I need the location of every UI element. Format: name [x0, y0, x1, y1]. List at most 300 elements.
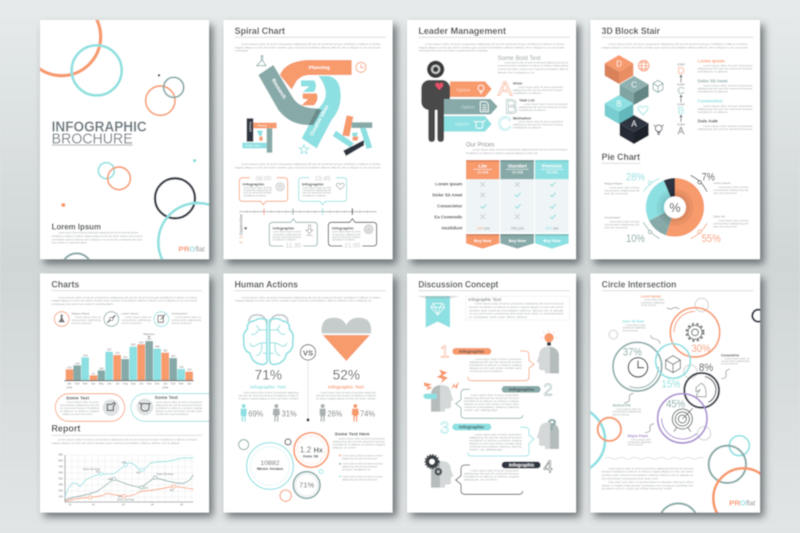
intro text: Lorem ipsum dolor sit amet consectetur adipiscing elit sed do eiusmod tempor incididunt ut labore et dolore [608, 42, 748, 46]
bar chart: 491 [163, 349, 168, 353]
side text block: adipiscing elit sed do eiusmod [342, 465, 377, 469]
pie chart [646, 178, 704, 237]
people statistics [241, 404, 375, 422]
side text block: Lorem ipsum dolor sit amet consect [342, 474, 383, 478]
item 4: aliqua ut enim [464, 478, 499, 482]
bar chart: Maximum [143, 332, 156, 336]
step descriptions: Lorem ipsum dolor sit amet consectetur [703, 104, 753, 108]
intro text box: ex ea commodo consequat duis aute irure dolor in reprehenderit [469, 312, 564, 316]
step ladder: A [678, 126, 685, 137]
body text: Duis aute irure dolor in reprehenderit in voluptate velit esse cillum [608, 480, 694, 484]
callout pill right: Lorem ipsum dolor sit amet consectetur [155, 400, 202, 404]
list item: motivation [498, 116, 564, 132]
side text block: Lorem ipsum dolor sit amet consect [342, 453, 383, 457]
callout: magna aliqua: Lorem ipsum dolor [631, 437, 651, 441]
item 3: adipiscing elit sed do eiusmod tempor [469, 436, 522, 440]
side text block [333, 432, 386, 481]
stat: 52%: et dolore magna aliqua ut enim ad minim veniam [316, 396, 377, 400]
step descriptions: Lorem ipsum dolor sit amet consectetur [703, 64, 753, 68]
pie descriptions: Dolor Sit [713, 215, 725, 219]
line chart: 02 [92, 503, 95, 507]
pricing table: Buy Now [543, 238, 561, 243]
stat: 52%: 52% [333, 368, 360, 383]
head with question mark [537, 417, 559, 449]
large spiral chart: Creative Ideas [309, 104, 330, 137]
line chart: 843 [122, 460, 127, 464]
pricing table: 15,99$ [512, 171, 523, 175]
bar chart: Jan [67, 381, 72, 385]
panel: spiral chart [223, 20, 393, 259]
logo: O [189, 245, 195, 254]
list item: ideas: incididunt ut labore [513, 91, 542, 95]
callout: lorem ipsum: Lorem ipsum dolor [644, 298, 664, 302]
event card 08:00 [239, 175, 288, 205]
bar chart: Jun [107, 381, 112, 385]
heading: 3D Block Stair [602, 26, 660, 36]
panel: discussion concept [407, 273, 576, 513]
callout: nostrud elit: sed do eiusmod [613, 412, 630, 416]
line chart: 04 [151, 503, 154, 507]
step descriptions: incididunt ut labore [698, 90, 728, 94]
pie labels: 28% [626, 171, 645, 183]
feature icons row: Lorem Ipsum [121, 312, 139, 316]
timeline: September [239, 214, 244, 235]
intro text: Lorem ipsum dolor sit amet consectetur adipiscing elit sed do eiusmod tempor incididunt ut labore et dolore [425, 42, 565, 46]
line chart: Dolor Sit Amet [118, 497, 135, 501]
cover title: INFOGRAPHIC [52, 120, 147, 136]
wavy line [605, 457, 704, 459]
versus marker: VS [303, 348, 313, 357]
event card 08:00: 08:00 [255, 175, 272, 182]
item 4: Lorem ipsum dolor sit amet consectetur [471, 469, 519, 473]
callout pill left: do eiusmod tempor incididunt [60, 406, 100, 410]
pricing table: Consectetur [437, 204, 463, 209]
body text: Lorem ipsum dolor sit amet consectetur adipiscing elit sed do eiusmod [608, 466, 694, 470]
pie chart heading: Pie Chart [602, 152, 640, 162]
cover title: BROCHURE [52, 131, 133, 147]
feature icons row [54, 312, 202, 326]
line chart: 276 [144, 486, 149, 490]
step descriptions: adipiscing elit sed do eiusmod tempor [698, 87, 753, 91]
item 2: nisi ut aliquip [464, 408, 498, 412]
timeline: 23 [239, 236, 245, 244]
step ladder: STEP [677, 122, 685, 126]
bar chart: 160 [187, 368, 192, 372]
heading: report: Report [51, 424, 80, 434]
body text: tempor incididunt ut labore et dolore magna aliqua ut enim ad minim [602, 470, 694, 474]
step ladder: STEP [677, 62, 685, 66]
callout: consectetur: sed do eiusmod [721, 362, 738, 366]
callout: magna aliqua: sed do eiusmod [628, 443, 643, 447]
circle cluster [239, 433, 329, 501]
circle: 45% target: 45% [666, 399, 685, 411]
pie descriptions: consectetur adipiscing elit [604, 222, 640, 226]
item 3: nostrud exercitation ullamco laboris [469, 445, 523, 449]
step descriptions: adipiscing elit sed do eiusmod tempor [698, 127, 753, 131]
feature icons row: Consectetur [171, 312, 187, 316]
circle: 15% cube: 15% [661, 379, 681, 391]
pricing table: Premium [542, 164, 562, 169]
item 2: aliqua ut enim ad minim veniam quis [464, 402, 520, 406]
bar chart: 634 [139, 340, 144, 344]
intro text box: in voluptate velit esse cillum dolore [469, 315, 528, 319]
isometric blocks: B [616, 100, 622, 109]
bar chart: 61 [92, 371, 95, 375]
intro text: Lorem ipsum dolor sit amet consectetur adipiscing elit sed do eiusmod tempor incididunt ut labore et dolore [241, 42, 381, 46]
circle cluster: 10882 [260, 460, 280, 467]
prices heading [466, 142, 568, 155]
item 3: Infographic [459, 425, 485, 430]
stat: 71%: Infographic Text [250, 385, 286, 390]
item 2: Lorem ipsum dolor sit amet consectetur [471, 393, 519, 397]
pricing table [432, 160, 569, 249]
event card 21:00 [328, 219, 377, 250]
pie descriptions: consectetur adipiscing elit [713, 188, 749, 192]
large spiral chart: Planning [309, 65, 330, 71]
small spiral left: Planning [258, 125, 267, 127]
line chart: Dolor Sit Amet [83, 467, 100, 471]
feature icons row: Lorem ipsum dolor sit [125, 315, 151, 319]
feature icons row: sed do eiusmod [71, 321, 92, 325]
intro text box: Infographic Text [468, 297, 502, 302]
option arrows: Option [461, 105, 475, 110]
list item: ideas: adipiscing elit sed do eiusmod tempor [513, 88, 563, 92]
intro text: magna aliqua ut enim ad minim veniam quis nostrud exercitation ullamco laboris nisi ut aliquip ex ea commodo [418, 45, 565, 49]
item 2: 2 [543, 380, 553, 400]
callout: lorem ipsum: consectetur adipiscing [641, 300, 665, 304]
bar chart: 367 [171, 354, 176, 358]
line chart: 329 [136, 470, 141, 474]
feature icons row: Lorem ipsum dolor sit [175, 315, 201, 319]
callout: consectetur: consectetur adipiscing [721, 359, 750, 363]
cover subtitle and text [52, 222, 143, 245]
step descriptions: incididunt ut labore [698, 110, 728, 114]
line chart: 200 [58, 495, 63, 499]
decorative circles [39, 19, 210, 260]
item 2: Infographic [509, 387, 535, 392]
report intro text [51, 438, 198, 445]
bar chart: 586 [155, 345, 160, 349]
isometric blocks: C [631, 80, 637, 89]
logo: O [740, 498, 746, 507]
pie descriptions [604, 181, 749, 229]
item 2: incididunt ut labore et dolore magna [464, 399, 520, 403]
circle: 37% clock [613, 342, 662, 391]
list item: task list: adipiscing elit sed do eiusmod tempor [519, 105, 568, 109]
bar chart: Sep [131, 381, 136, 385]
timeline intro text: Lorem ipsum dolor sit amet consectetur adipiscing elit sed do eiusmod tempor incididunt ut labore et dolore [241, 162, 381, 166]
logo: PR [729, 498, 741, 507]
panel: leader management [407, 20, 576, 259]
line chart: 110 [118, 494, 123, 498]
bar chart: Mar [179, 381, 184, 385]
stat: 71%: elit sed do eiusmod tempor incididunt ut labore [238, 393, 299, 397]
item 4: 4 [543, 456, 553, 476]
bar chart: Jan [163, 381, 168, 385]
feature icons row: sed do eiusmod [121, 321, 142, 325]
pricing table: 10,99$ [477, 171, 488, 175]
bar chart: 2016 [162, 386, 169, 390]
cover subtitle and text: irure dolor in reprehenderit [52, 241, 87, 245]
step descriptions: Dolor Sit Amet [698, 78, 728, 83]
line chart: 700 [58, 465, 63, 469]
bold text block: Some Bold Text [498, 56, 541, 62]
body text: ea commodo consequat duis aute irure [602, 476, 659, 480]
step ladder: STEP [677, 82, 685, 86]
event card 15:45: sed do eiusmod tempor [303, 191, 331, 195]
pie labels: 55% [702, 233, 721, 245]
cover title [52, 120, 147, 147]
people statistics: 26% [327, 408, 343, 418]
stat: 71%: Lorem ipsum dolor sit amet consectetur adipiscing [243, 390, 299, 394]
callout: magna aliqua: consectetur adipiscing [628, 440, 651, 444]
circle: 30% gear [670, 308, 720, 357]
icon: brain [243, 315, 293, 364]
callout: lorem ipsum [641, 295, 679, 309]
pricing table: 25,99$ [546, 171, 558, 175]
list item: ideas: Ideas [513, 82, 522, 86]
item 3 [440, 417, 534, 456]
pie descriptions: Magna Aliqua [604, 182, 623, 186]
item 3: 3 [440, 417, 449, 437]
intro text: consequat duis aute irure dolor in reprehenderit [51, 302, 113, 306]
isometric blocks: D [616, 60, 622, 69]
item 2: adipiscing elit sed do eiusmod tempor [464, 396, 519, 400]
isometric blocks [605, 55, 649, 144]
callout: dolor sit amet: sed do eiusmod [622, 328, 638, 332]
circle: 45% target [658, 394, 707, 443]
intro text: Lorem ipsum dolor sit amet consectetur adipiscing elit sed do eiusmod tempor incididunt ut labore et dolore [241, 295, 381, 299]
bold text block: eiusmod tempor incididunt ut labore et dolore magna aliqua [498, 64, 569, 68]
side text block: adipiscing elit sed do eiusmod [342, 456, 377, 460]
event card 08:00: Infographic [243, 181, 265, 186]
callout: lorem ipsum: sed do eiusmod [641, 303, 656, 307]
pricing table: Ea Commodo [434, 214, 463, 219]
line chart: 600 [58, 471, 63, 475]
option arrows: Option [455, 122, 469, 127]
list item: ideas [496, 80, 564, 96]
stat: 52%: Lorem ipsum dolor sit amet consectetur adipiscing [321, 390, 376, 394]
intro text: magna aliqua ut enim ad minim veniam quis nostrud exercitation ullamco laboris nisi ut aliquip ex ea commodo [602, 45, 748, 49]
event card 15:45: incididunt ut labore [303, 193, 327, 197]
item 1: adipiscing elit sed do eiusmod tempor [469, 360, 522, 364]
logo [729, 498, 756, 507]
pricing table: Standart [508, 164, 527, 169]
item 3: nisi ut aliquip [469, 448, 504, 452]
bar chart: Feb [75, 381, 80, 385]
step descriptions: Duis Aute [698, 119, 718, 124]
cover subtitle and text: Lorem Ipsum [52, 222, 101, 232]
list item: task list [506, 98, 568, 114]
pie descriptions: Lorem ipsum dolor sit amet [718, 185, 749, 189]
pie descriptions: Lorem Ipsum [713, 181, 731, 185]
stat: 71%: 71% [255, 368, 282, 383]
cover subtitle and text: incididunt ut labore et dolore magna aliqua ut enim ad minim veniam quis nostrud [52, 234, 143, 238]
item 4 [456, 456, 553, 494]
pricing table: 250 pts [511, 226, 524, 231]
intro text [602, 42, 748, 49]
intro text: magna aliqua ut enim ad minim veniam quis nostrud exercitation ullamco laboris nisi ut aliquip ex ea commodo [235, 45, 381, 49]
event card 11:30: incididunt ut labore [273, 238, 297, 242]
pie descriptions: Lorem ipsum dolor sit amet [609, 186, 640, 190]
event card 21:00: Infographic [332, 225, 354, 230]
pricing table: Lite [479, 164, 487, 169]
callout: nostrud elit [613, 393, 642, 416]
item 2: nostrud exercitation ullamco laboris [464, 405, 520, 409]
event card 15:45: Lorem ipsum dolor sit amet [303, 185, 331, 189]
callout: lorem ipsum: Lorem Ipsum [641, 295, 661, 299]
bar chart: 411 [123, 355, 128, 359]
bar chart: 419 [83, 353, 88, 357]
stat: 52% [316, 368, 377, 400]
large spiral chart: Research [270, 78, 287, 100]
heading: Discussion Concept [418, 280, 498, 290]
bar chart: Jul [116, 381, 119, 385]
callout: consectetur: Consectetur [721, 353, 740, 357]
callout: consectetur [721, 353, 750, 379]
people statistics: 31% [282, 408, 297, 418]
list item: ideas: Lorem ipsum dolor sit amet consectetur [518, 85, 563, 89]
item 4: adipiscing elit sed do eiusmod tempor [464, 472, 519, 476]
isometric blocks: A [631, 119, 637, 128]
bar chart: Dec [155, 381, 160, 385]
step descriptions: Consectetur [698, 99, 723, 104]
bar chart [64, 332, 194, 390]
pricing table: Incididunt [442, 225, 463, 230]
item 3: Lorem ipsum dolor sit amet consectetur [475, 433, 522, 437]
bar chart: Nov [147, 381, 152, 385]
timeline intro text: magna aliqua ut enim ad minim veniam quis nostrud exercitation ullamco laboris nisi ut aliquip ex ea commodo [235, 165, 381, 169]
pie labels: 7% [702, 171, 715, 183]
circle: 30% gear: 30% [691, 343, 711, 355]
pie descriptions: sed do eiusmod [604, 225, 628, 229]
callout pill right: nostrud exercitation [155, 412, 189, 416]
step descriptions: Lorem ipsum dolor sit amet consectetur [703, 124, 753, 128]
pie labels: 10% [626, 233, 645, 245]
stat: 52%: elit sed do eiusmod tempor incididunt ut labore [316, 393, 377, 397]
event card 08:00: consectetur adipiscing elit [243, 188, 272, 192]
versus marker [300, 345, 316, 421]
list item: task list: Lorem ipsum dolor sit amet consectetur [524, 102, 568, 106]
circle: 8% knight [684, 362, 719, 408]
step descriptions: Lorem ipsum dolor sit amet consectetur [703, 84, 753, 88]
head with gears [425, 455, 453, 488]
small spiral right [333, 115, 372, 156]
pie descriptions: consectetur adipiscing elit [604, 189, 640, 193]
stat: 71%: et dolore magna aliqua ut enim ad minim veniam [238, 396, 299, 400]
timeline [239, 208, 377, 244]
icon: heart half-filled [321, 318, 371, 361]
stat: 71% [238, 368, 299, 400]
bar chart: May [99, 381, 105, 385]
callout: nostrud elit: consectetur adipiscing [613, 410, 642, 414]
intro text [51, 295, 198, 306]
callout pill right: incididunt ut labore et dolore magna [155, 406, 203, 410]
people statistics: 69% [248, 408, 264, 418]
report intro text: Lorem ipsum dolor sit amet consectetur adipiscing elit sed do eiusmod tempor incididunt ut labore et dolore [58, 438, 198, 442]
step descriptions: adipiscing elit sed do eiusmod tempor [698, 67, 753, 71]
event card 21:00: 21:00 [344, 243, 361, 250]
step ladder: B [678, 106, 684, 117]
feature icons row: consectetur adipiscing [71, 318, 102, 322]
heading: Spiral Chart [235, 26, 285, 36]
pie descriptions: sed do eiusmod [713, 191, 737, 195]
intro text: Lorem ipsum dolor sit amet consectetur adipiscing elit sed do eiusmod tempor incididunt ut labore et dolore [58, 295, 198, 299]
event card 11:30: consectetur adipiscing elit [273, 232, 301, 236]
event card 08:00: Lorem ipsum dolor sit amet [243, 185, 272, 189]
item 1: Infographic [459, 349, 485, 354]
pricing table: Lorem Ipsum [435, 182, 462, 187]
prices heading: incididunt ut labore et dolore magna aliqua ut enim ad [466, 151, 538, 155]
intro text: consequat duis aute irure dolor in reprehenderit in voluptate [418, 49, 488, 53]
side text block: tempor incididunt ut [342, 468, 371, 472]
bar chart: 507 [107, 348, 112, 352]
intro text [235, 295, 381, 303]
event card 11:30: Lorem ipsum dolor sit amet [273, 230, 301, 234]
bar chart: 603 [131, 343, 136, 347]
prices heading: Our Prices [466, 142, 494, 149]
item 2 [456, 380, 553, 418]
item 1: aliqua ut enim ad minim veniam quis [469, 366, 522, 370]
small spiral left [242, 118, 277, 153]
decorative outer circles [538, 298, 773, 533]
line chart: 500 [58, 477, 63, 481]
large spiral chart [258, 60, 352, 148]
list item: motivation: Motivation [513, 116, 531, 120]
bar chart: 243 [75, 361, 80, 365]
event card 15:45: 15:45 [315, 175, 331, 182]
list item: task list: Task List [519, 99, 535, 103]
item 4: Infographic [509, 463, 535, 468]
event card 21:00: consectetur adipiscing elit [332, 232, 361, 236]
panel: circle intersection [538, 273, 773, 533]
circle cluster: 71% [299, 481, 315, 490]
intro text: magna aliqua ut enim ad minim veniam quis nostrud exercitation ullamco laboris nisi ut aliquip ex [235, 299, 372, 303]
stat: 52%: Infographic Text [328, 385, 364, 390]
intro text: magna aliqua ut enim ad minim veniam quis nostrud exercitation ullamco laboris nisi ut aliquip ex ea commodo [51, 299, 198, 303]
callout: dolor sit amet: Lorem ipsum dolor [626, 323, 646, 327]
pie descriptions: Lorem ipsum dolor sit amet [609, 219, 640, 223]
line chart: 300 [58, 489, 63, 493]
callout pill right: Some Text [155, 395, 178, 400]
list item: motivation: C [498, 114, 512, 136]
callout: dolor sit amet [622, 320, 660, 344]
pricing table: Buy Now [509, 238, 527, 243]
feature icons row: sed do eiusmod [171, 321, 192, 325]
item 1: Lorem ipsum dolor sit amet consectetur [475, 357, 522, 361]
icon: globe [638, 60, 649, 71]
heading: Leader Management [418, 26, 506, 36]
circle: 37% clock: 37% [623, 347, 642, 359]
circle cluster: 1.2 Hx [300, 445, 324, 455]
cover subtitle and text: Lorem ipsum dolor sit amet consectetur adipiscing elit sed do eiusmod tempor [58, 231, 138, 235]
bar chart: Feb [171, 381, 176, 385]
bar chart: 2015 [66, 386, 73, 390]
bar chart: 470 [115, 351, 120, 355]
small spiral left: Creative Ideas [245, 144, 261, 147]
callout: consectetur: Lorem ipsum dolor sit [724, 356, 750, 360]
circle cluster: Dolor Sit [303, 455, 319, 459]
item 3: incididunt ut labore et dolore magna [469, 439, 522, 443]
step descriptions [698, 58, 753, 131]
line chart: 900 [58, 453, 63, 457]
logo: flat [746, 498, 756, 507]
step descriptions: incididunt ut labore [698, 70, 728, 74]
item 4: incididunt ut labore et dolore magna [464, 475, 520, 479]
item 3: aliqua ut enim ad minim veniam quis [469, 442, 522, 446]
pricing table: 100 pts [477, 226, 490, 231]
item 1: nostrud exercitation [469, 369, 503, 373]
